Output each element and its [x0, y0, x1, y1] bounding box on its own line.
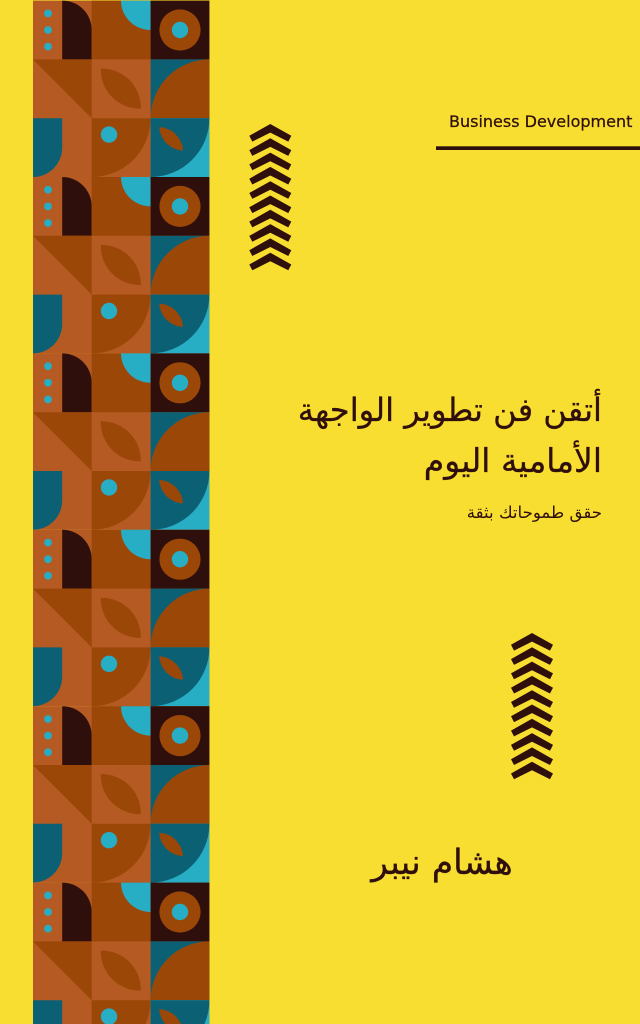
- title: [298, 388, 602, 480]
- divider line under category: [436, 146, 640, 150]
- category label: Business Development: [449, 112, 632, 131]
- chevrons: upper left: [249, 124, 291, 270]
- subtitle: حقق طموحاتك بثقة: [467, 503, 602, 522]
- author name: هشام نيبر: [371, 843, 513, 883]
- chevrons: lower right: [511, 633, 553, 779]
- title: الأمامية اليوم: [424, 440, 602, 480]
- title: أتقن فن تطوير الواجهة: [298, 391, 602, 429]
